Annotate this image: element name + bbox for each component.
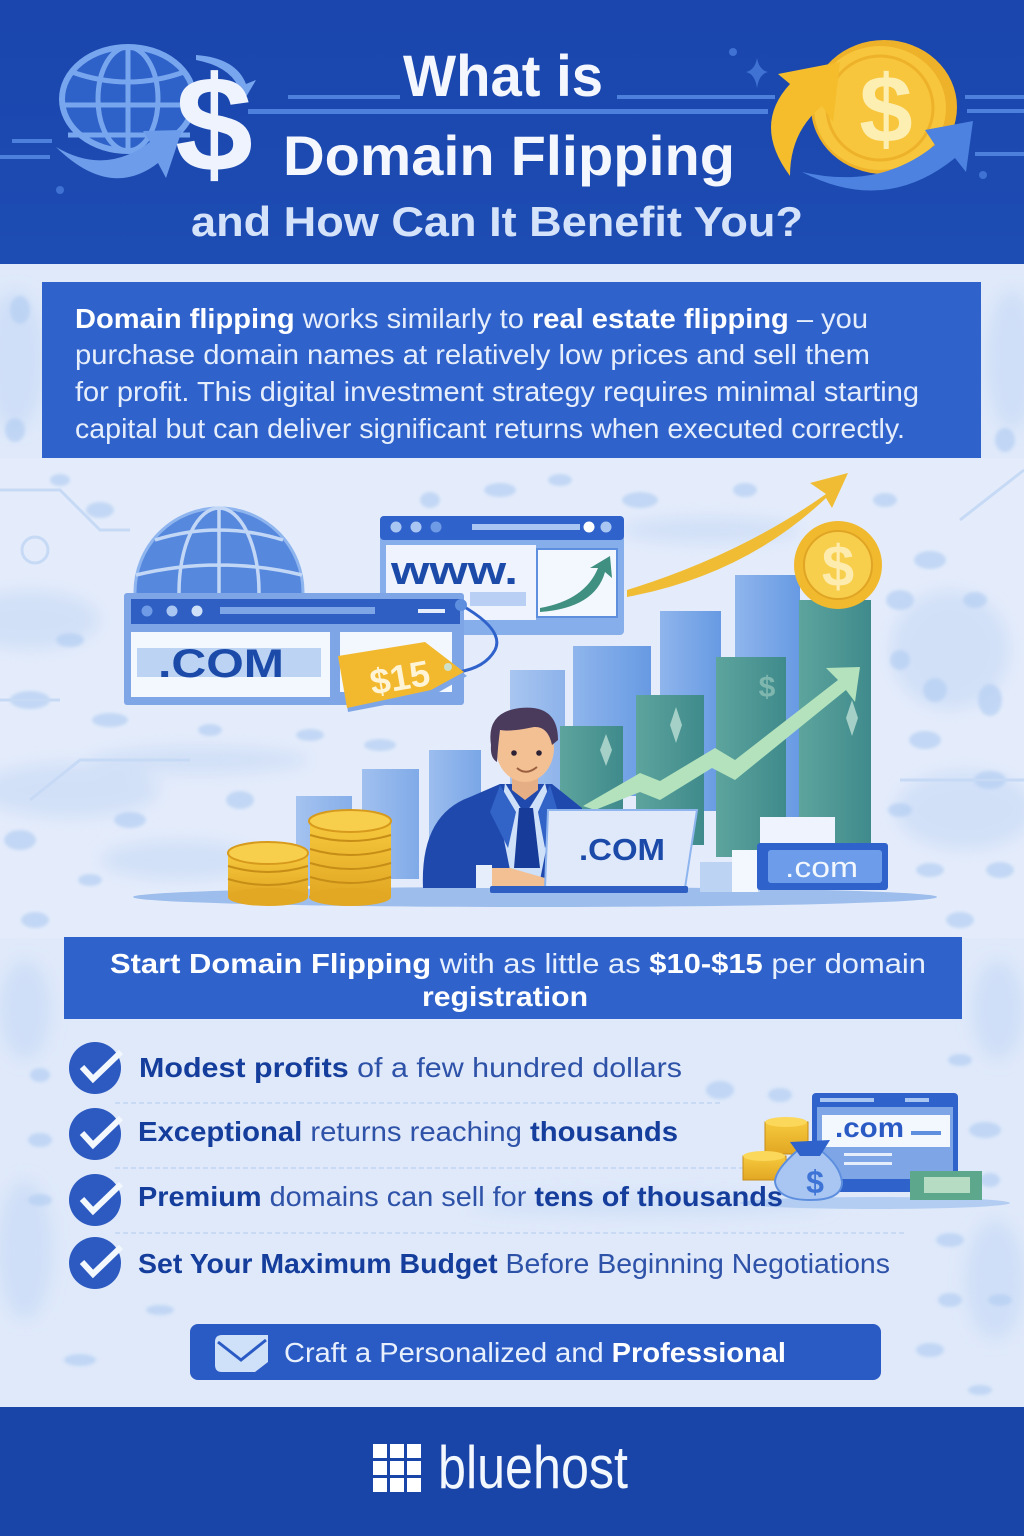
callout: starting cost: Start Domain Flipping with as little as $10-$15 per domain: [110, 948, 926, 979]
laptop: .COM: [579, 832, 665, 867]
panel: intro text: [42, 282, 981, 458]
icon: $15 price tag: $15: [367, 652, 433, 703]
list item: maximum budget: [69, 1237, 890, 1289]
icon: globe with dollar and arrows: [56, 47, 256, 200]
icon: gold coin with arrows: [771, 40, 973, 190]
title: and How Can It Benefit You?: [191, 198, 803, 245]
icon: money bag: $: [806, 1164, 824, 1200]
callout: starting cost: [64, 937, 962, 1019]
list item: premium domains: [69, 1174, 783, 1226]
left coin stack: [228, 842, 308, 906]
window: .COM domain listing: .COM: [158, 642, 284, 686]
list item: exceptional returns: [69, 1108, 678, 1160]
window: www: www.: [390, 549, 518, 593]
list item: premium domains: Premium domains can sell for tens of thousands: [138, 1181, 783, 1212]
icon: envelope: [215, 1335, 268, 1372]
benefits list: [69, 1042, 1010, 1289]
icon: gold dollar coin: $: [822, 534, 854, 599]
icon: gold dollar coin: [794, 521, 882, 609]
icon: $15 price tag: [338, 599, 497, 712]
blue bar chart: [296, 575, 800, 886]
icon: cash: [910, 1171, 982, 1200]
card: .com: [757, 843, 888, 890]
title: Domain Flipping: [283, 124, 735, 187]
arrow: gold growth arrow: [627, 473, 848, 597]
panel: intro text: Domain flipping works similarly to real estate flipping – you: [75, 303, 868, 334]
window: www: [380, 516, 624, 635]
person: businessman: [423, 708, 582, 888]
icon: stacks of gold coins: [228, 810, 391, 906]
icon: gold coin with arrows: $: [859, 56, 913, 163]
callout: starting cost: registration: [422, 981, 588, 1012]
list item: modest profits: [69, 1042, 682, 1094]
title: [191, 44, 803, 245]
title: What is: [403, 44, 603, 109]
button: personalized message: Craft a Personalized and Professional: [284, 1337, 786, 1368]
arrow: green trend line: [583, 667, 860, 810]
mini illustration: domain and money bag: [740, 1093, 1010, 1209]
right coin stack: [309, 810, 391, 906]
green bar chart: $: [759, 671, 776, 704]
page background: [0, 264, 1024, 1408]
footer banner: [0, 1407, 1024, 1536]
header banner: [0, 0, 1024, 264]
logo: bluehost: bluehost: [438, 1434, 628, 1501]
ground shadow: [133, 887, 937, 907]
mini illustration: domain and money bag: .com: [835, 1112, 904, 1143]
list item: exceptional returns: Exceptional returns reaching thousands: [138, 1116, 678, 1147]
card: .com: .com: [785, 852, 858, 884]
list item: modest profits: Modest profits of a few hundred dollars: [139, 1052, 682, 1083]
icon: globe with dollar and arrows: $: [175, 48, 253, 200]
panel: intro text: capital but can deliver significant returns when executed correctly.: [75, 413, 905, 444]
icon: money bag: [775, 1140, 842, 1200]
green bar chart: [560, 600, 871, 857]
illustration: domain flipping scene: [124, 473, 937, 907]
laptop: [490, 810, 697, 893]
button: personalized message: [190, 1324, 881, 1380]
panel: intro text: for profit. This digital investment strategy requires minimal starting: [75, 376, 919, 407]
papers stack: [700, 817, 835, 892]
icon: globe dome: [134, 506, 304, 593]
window: .COM domain listing: [124, 593, 464, 705]
panel: intro text: purchase domain names at relatively low prices and sell them: [75, 339, 870, 370]
logo: bluehost: [373, 1434, 628, 1501]
list item: maximum budget: Set Your Maximum Budget Before Beginning Negotiations: [138, 1248, 890, 1279]
